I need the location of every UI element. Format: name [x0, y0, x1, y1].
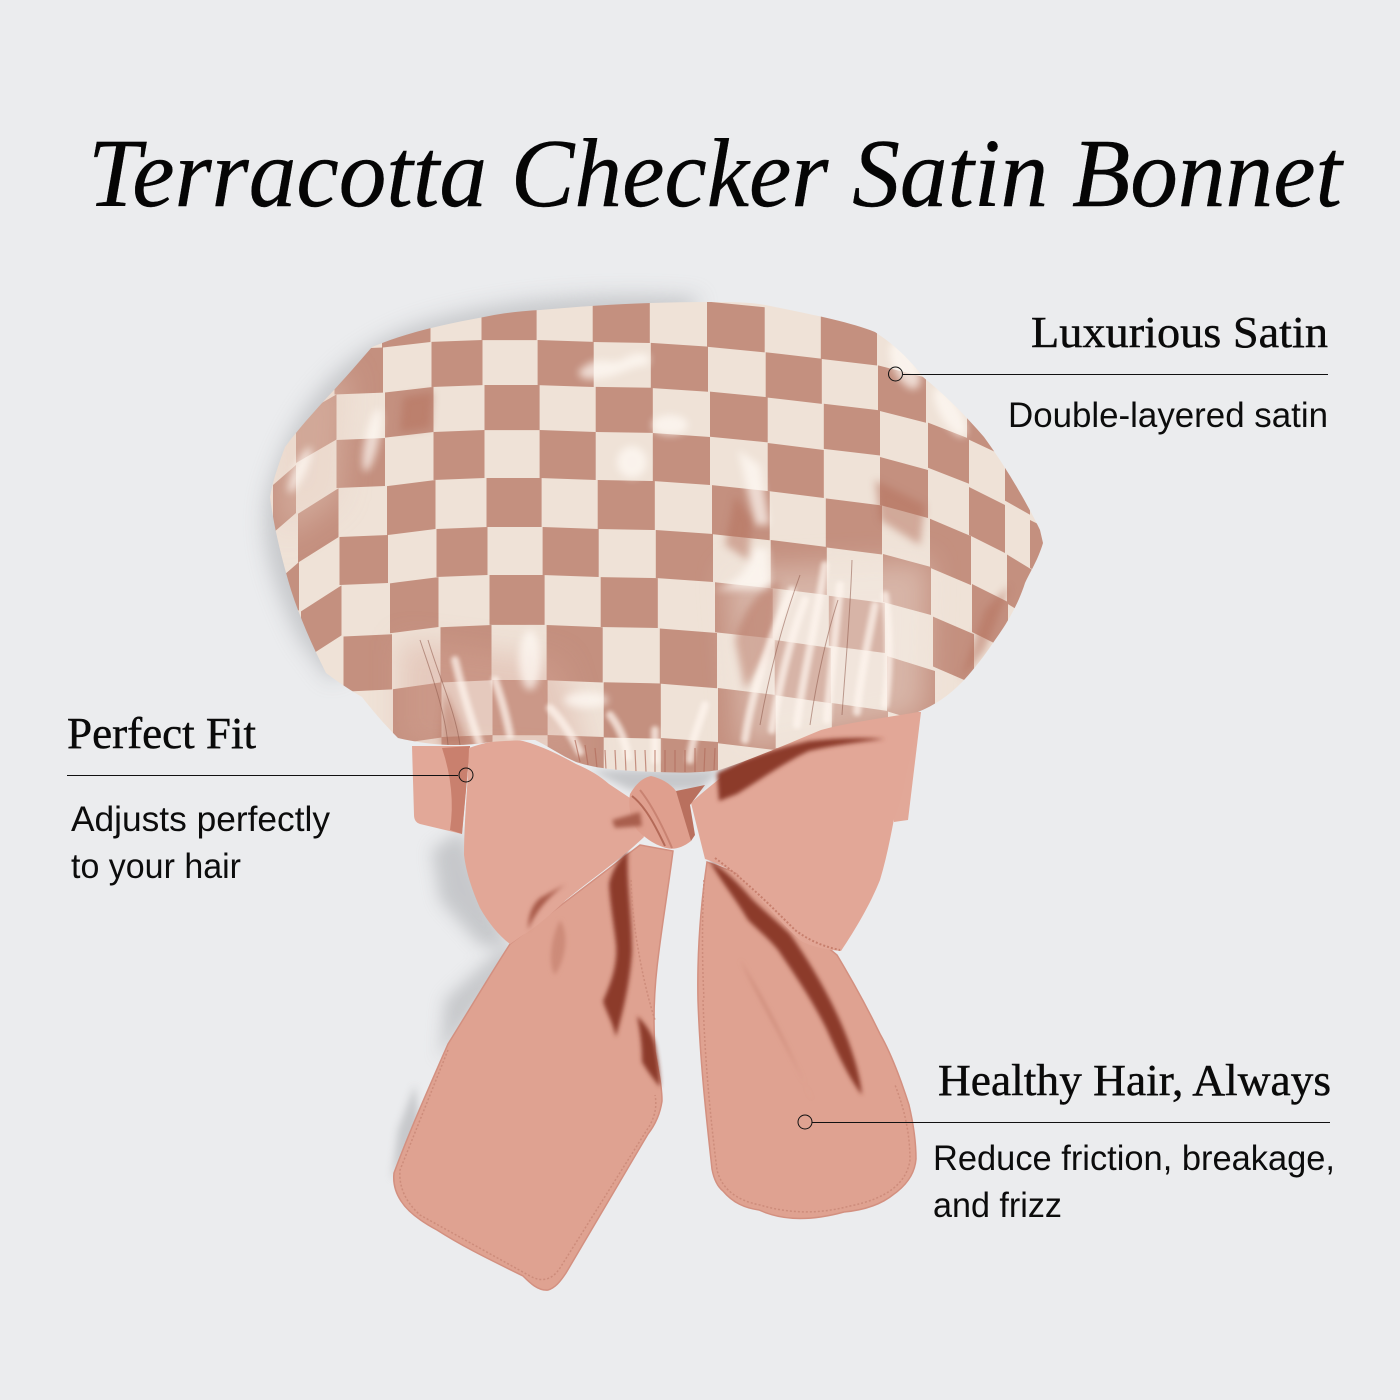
right bow wing — [691, 712, 921, 951]
heading: Healthy Hair, Always — [938, 1056, 1331, 1105]
leader line and marker — [888, 367, 1328, 381]
broad tonal washes — [270, 370, 930, 760]
light base — [260, 290, 1060, 790]
right tail — [698, 862, 916, 1218]
bonnet — [270, 302, 1043, 773]
back tie tabs — [412, 712, 921, 834]
right wing seam — [715, 858, 840, 950]
heading: Luxurious Satin — [1031, 308, 1328, 357]
gathered pleats shadows — [420, 560, 852, 745]
darker satin folds — [400, 392, 1010, 745]
callout: Luxurious Satin — [888, 308, 1328, 435]
callout: Perfect Fit — [67, 709, 473, 886]
left tail — [394, 845, 673, 1290]
left tail fold — [551, 850, 660, 1087]
description: Adjusts perfectly — [71, 800, 330, 839]
leader line and marker — [67, 768, 473, 782]
gathered pleats highlights — [455, 565, 889, 760]
left bow wing — [464, 740, 644, 944]
heading: Perfect Fit — [67, 709, 256, 758]
knot — [612, 776, 705, 849]
soft drop shadow — [265, 295, 720, 1180]
satin highlights — [284, 336, 973, 708]
leader line and marker — [798, 1115, 1330, 1129]
tail seam stitching — [400, 880, 910, 1280]
elastic gather — [575, 740, 715, 772]
left wing inner fold — [528, 884, 566, 930]
description: and frizz — [933, 1186, 1062, 1225]
description: Double-layered satin — [1008, 396, 1328, 435]
description: to your hair — [71, 847, 241, 886]
title: Terracotta Checker Satin Bonnet — [88, 120, 1345, 228]
right wing dark underfold — [717, 738, 885, 801]
right tail fold — [709, 860, 862, 1100]
checker pattern — [273, 302, 1043, 773]
description: Reduce friction, breakage, — [933, 1139, 1335, 1178]
infographic canvas — [67, 138, 1344, 1291]
callout: Healthy Hair, Always — [798, 1056, 1335, 1225]
product: bonnet with bow — [260, 290, 1060, 1290]
